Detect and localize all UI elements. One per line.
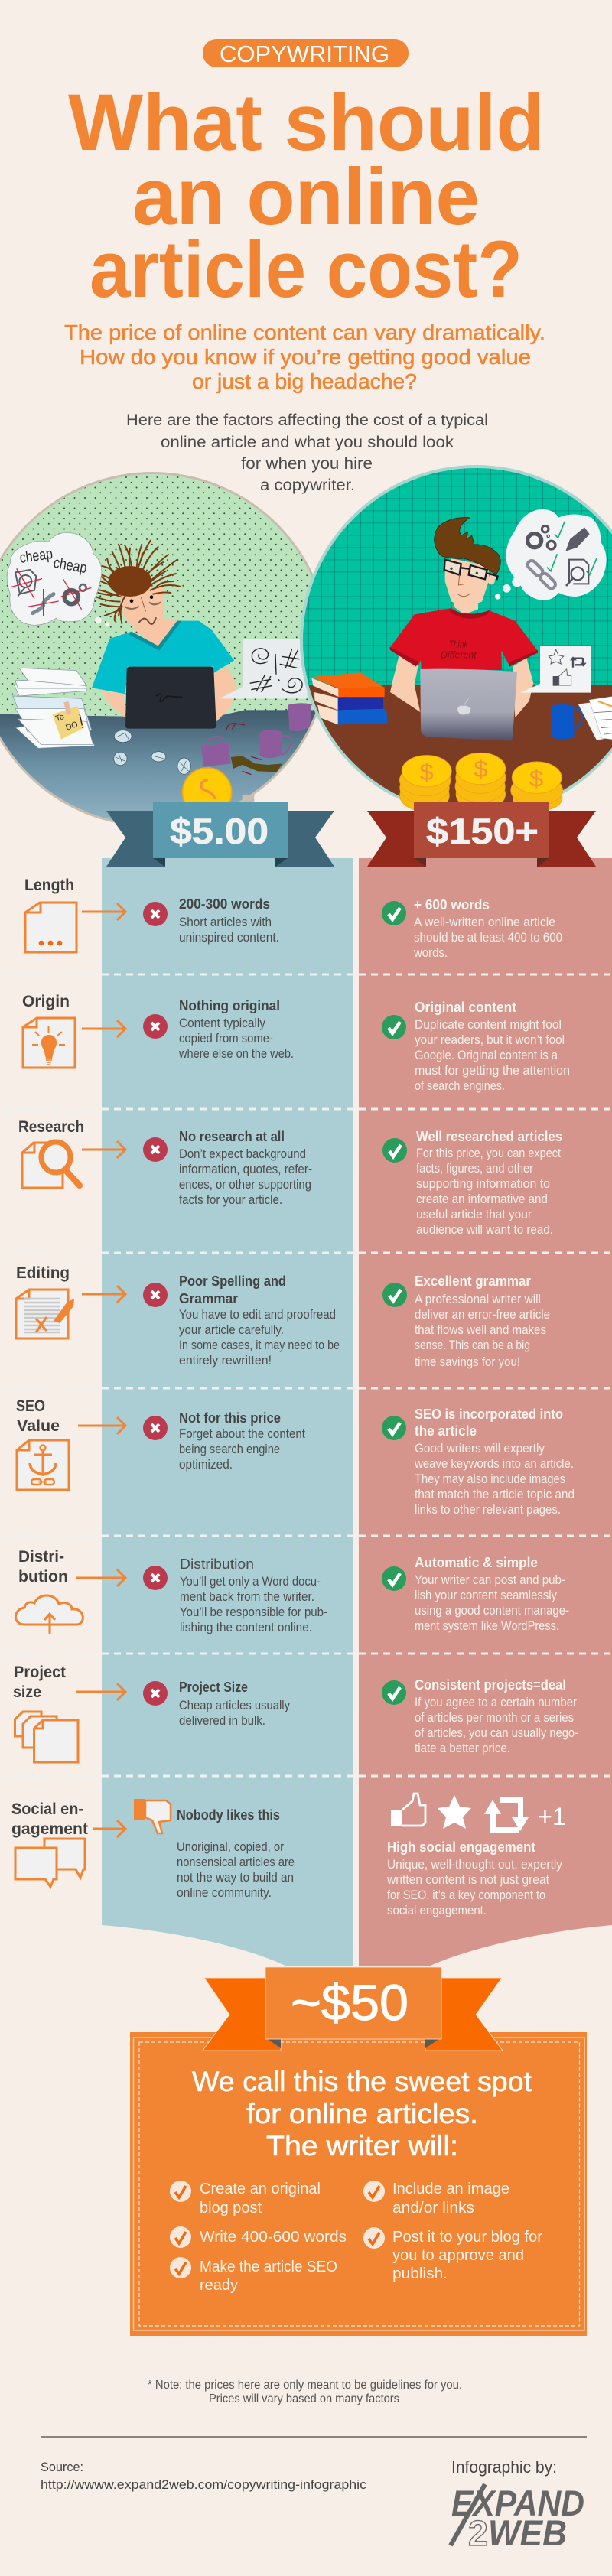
high price text: If you agree to a certain number <box>415 1696 577 1709</box>
low price text: Project Size <box>179 1679 248 1695</box>
low price text: Short articles with <box>179 916 272 929</box>
icon: check <box>382 1138 407 1163</box>
intro text: a copywriter. <box>260 476 355 494</box>
label <box>13 1664 66 1701</box>
low price text: uninspired content. <box>179 931 279 945</box>
high price text: lish your content seamlessly <box>415 1589 558 1602</box>
glasses <box>444 560 498 580</box>
low price text: delivered in bulk. <box>179 1714 265 1728</box>
social note <box>520 646 591 693</box>
t-shirt slogan <box>441 640 477 658</box>
high price text: + 600 words <box>414 896 490 912</box>
high price text: of search engines. <box>415 1079 505 1093</box>
label <box>16 1397 60 1435</box>
icon: x <box>143 1566 168 1590</box>
high price text: words. <box>413 946 448 960</box>
low price text: Forget about the content <box>179 1427 305 1441</box>
low price text: You have to edit and proofread <box>179 1308 336 1322</box>
low price text: You’ll get only a Word docu- <box>180 1575 321 1589</box>
low price text: information, quotes, refer- <box>179 1163 312 1176</box>
desk <box>309 685 612 802</box>
label: size <box>13 1683 41 1701</box>
high price text: that match the article topic and <box>415 1488 575 1501</box>
high price text: time savings for you! <box>415 1355 520 1369</box>
high price text <box>415 1273 550 1369</box>
coin left <box>183 768 254 817</box>
ribbon: ~$50 <box>203 1967 503 2051</box>
icon: check <box>382 1015 406 1039</box>
high price text: Well researched articles <box>416 1128 562 1144</box>
subtitle: or just a big headache? <box>192 369 417 393</box>
high price text: written content is not just great <box>386 1873 549 1887</box>
low price text: Don’t expect background <box>179 1147 306 1161</box>
high price text: create an informative and <box>416 1192 548 1206</box>
low price text: Content typically <box>179 1016 266 1030</box>
subtitle: How do you know if you’re getting good value <box>80 345 531 369</box>
high price text: your readers, but it won’t fool <box>415 1033 565 1047</box>
illustration: premium writer in right circle <box>298 459 612 826</box>
low price text: not the way to build an <box>177 1871 294 1885</box>
low price text <box>178 997 294 1061</box>
row: Length <box>24 877 562 960</box>
icon: document with magnifier <box>22 1142 80 1188</box>
low price text: In some cases, it may need to be <box>179 1338 340 1352</box>
ribbon: $150+: $150+ <box>426 811 539 851</box>
low price text <box>179 1273 340 1368</box>
row: SEO Value <box>16 1397 575 1517</box>
illustration: premium writer in right circle: $ <box>419 759 434 785</box>
checklist left: blog post <box>200 2199 262 2217</box>
low price text: where else on the web. <box>178 1047 294 1061</box>
source <box>41 2460 367 2492</box>
arrow <box>76 1683 125 1700</box>
low price text: Cheap articles usually <box>179 1699 291 1712</box>
high price text <box>413 896 562 960</box>
high price text <box>414 1406 575 1517</box>
arms <box>390 655 533 717</box>
high price text: should be at least 400 to 600 <box>414 931 562 945</box>
heading <box>192 2066 532 2161</box>
high price text: that flows well and makes <box>415 1323 546 1337</box>
ribbon: $5.00 <box>106 802 334 867</box>
high price text: High social engagement <box>387 1839 536 1855</box>
high price text: Excellent grammar <box>415 1273 531 1289</box>
low price text: 200-300 words <box>179 896 270 912</box>
credit: Infographic by: Infographic by: <box>451 2457 557 2477</box>
notes and pencil <box>578 702 606 740</box>
checklist right: Post it to your blog for <box>392 2228 542 2246</box>
desk <box>0 710 315 820</box>
high price text: Your writer can post and pub- <box>415 1573 565 1587</box>
arrow <box>93 1820 125 1837</box>
t-shirt slogan: Different <box>441 650 477 661</box>
illustration: cheap writer in left circle: cheap <box>52 555 88 577</box>
high price text: ment system like WordPress. <box>415 1619 559 1633</box>
high price text <box>386 1839 563 1917</box>
low price text: online community. <box>177 1886 272 1900</box>
label: Research <box>18 1118 84 1136</box>
intro text: online article and what you should look <box>161 434 454 451</box>
low price text <box>177 1807 295 1900</box>
high price text: using a good content manage- <box>415 1604 569 1618</box>
low price text: copied from some- <box>179 1032 273 1046</box>
arrow <box>78 1417 125 1434</box>
laptop <box>420 669 517 741</box>
title: article cost? <box>90 225 522 314</box>
subtitle <box>64 320 545 393</box>
title <box>68 78 545 314</box>
title: an online <box>132 152 480 242</box>
row: Project size <box>13 1664 578 1762</box>
heading: The writer will: <box>266 2130 458 2161</box>
source: Source: <box>41 2460 83 2474</box>
high price text: Google. Original content is a <box>415 1049 558 1062</box>
label: Social en- <box>11 1800 83 1818</box>
icon: speech bubbles <box>15 1839 85 1887</box>
low price text: being search engine <box>179 1442 280 1456</box>
arrow <box>82 1141 125 1158</box>
high price text: deliver an error-free article <box>415 1308 550 1322</box>
low price text: Poor Spelling and <box>179 1273 286 1289</box>
high price text: useful article that your <box>416 1208 532 1221</box>
panel: high price column <box>359 858 612 1966</box>
arrow <box>82 1020 125 1037</box>
icon: document with light bulb <box>23 1018 75 1068</box>
t-shirt slogan: Think <box>449 639 468 650</box>
icon: check <box>382 1416 406 1440</box>
high price text <box>415 1554 569 1633</box>
icon: check <box>382 901 406 925</box>
low price text <box>179 1128 312 1207</box>
label <box>18 1548 68 1586</box>
low price text: nonsensical articles are <box>177 1856 295 1869</box>
paper pile <box>13 668 95 748</box>
row: Research <box>18 1118 562 1237</box>
low price text: No research at all <box>179 1128 285 1144</box>
high price text: Good writers will expertly <box>415 1442 545 1456</box>
ribbon: $150+ <box>367 802 596 867</box>
high price text: audience will want to read. <box>416 1223 553 1237</box>
high price text: Original content <box>415 999 516 1015</box>
checklist left: Create an original <box>200 2180 321 2197</box>
high price text: of articles per month or a series <box>415 1711 574 1725</box>
high price text: A professional writer will <box>415 1293 541 1306</box>
label: Length <box>24 877 74 894</box>
icon: x <box>143 1014 168 1039</box>
checklist left: ready <box>200 2276 239 2294</box>
icon: x <box>143 1137 168 1162</box>
icon: document with anchor <box>17 1440 69 1490</box>
thought bubble left <box>7 532 102 625</box>
low price text: entirely rewritten! <box>179 1354 272 1368</box>
icon: document with pen <box>16 1290 74 1338</box>
heading: We call this the sweet spot <box>192 2066 532 2097</box>
hair <box>94 541 180 623</box>
blue mug <box>551 704 575 740</box>
illustration: premium writer in right circle: $ <box>474 756 488 782</box>
high price text: They may also include images <box>415 1472 565 1486</box>
low price text: ences, or other supporting <box>179 1178 311 1192</box>
illustration: cheap writer in left circle: DO <box>64 720 79 733</box>
high price text <box>416 1128 562 1237</box>
high price text: supporting information to <box>416 1177 550 1191</box>
high price text: for SEO, it’s a key component to <box>387 1888 545 1902</box>
row: Origin <box>22 993 570 1093</box>
intro text: for when you hire <box>241 455 373 473</box>
high price text: A well-written online article <box>414 916 555 929</box>
label: bution <box>18 1568 68 1586</box>
high price text <box>415 1677 578 1755</box>
subtitle: The price of online content can vary dramatically. <box>64 320 545 344</box>
label: Project <box>14 1664 66 1681</box>
logo: Expand2Web: EXPAND <box>451 2483 584 2523</box>
arrow <box>82 1286 125 1303</box>
icon: x <box>143 1416 168 1440</box>
high price text: SEO is incorporated into <box>415 1406 563 1422</box>
coffee stain <box>231 756 282 772</box>
high price text: sense. This can be a big <box>415 1338 530 1352</box>
ribbon: $5.00: $5.00 <box>170 811 269 851</box>
checklist left: Write 400-600 words <box>200 2228 347 2246</box>
icon: x <box>143 1283 168 1307</box>
panel: sweet spot <box>130 2032 587 2336</box>
checklist left <box>170 2180 347 2294</box>
intro text <box>126 411 488 494</box>
illustration: cheap writer in left circle <box>0 472 317 823</box>
scribble note <box>220 639 308 698</box>
high price text: links to other relevant pages. <box>415 1503 561 1517</box>
low price text: Not for this price <box>179 1410 281 1426</box>
high price text: Automatic & simple <box>415 1554 538 1570</box>
checklist right: and/or links <box>392 2199 474 2217</box>
high price text: For this price, you can expect <box>416 1147 561 1160</box>
checklist right: you to approve and <box>392 2246 524 2264</box>
coin stacks <box>399 762 563 812</box>
arrow <box>82 903 125 920</box>
high price text: Unique, well-thought out, expertly <box>387 1858 563 1872</box>
low price text: your article carefully. <box>179 1323 284 1337</box>
icon: thumbs down <box>134 1799 171 1833</box>
logo: Expand2Web: WEB <box>488 2513 567 2553</box>
thought bubble right <box>506 509 607 600</box>
intro text: Here are the factors affecting the cost of a typical <box>126 411 488 429</box>
illustration: premium writer in right circle: $ <box>529 766 543 792</box>
book stack <box>311 672 384 688</box>
high price text: the article <box>415 1423 477 1439</box>
low price text <box>179 1679 291 1728</box>
row: Editing <box>16 1264 550 1369</box>
low price text: ment back from the writer. <box>180 1590 314 1604</box>
icon: check <box>382 1566 406 1591</box>
illustration: cheap writer in left circle: cheap <box>18 545 54 567</box>
high price text: weave keywords into an article. <box>414 1457 574 1471</box>
label: SEO <box>16 1397 45 1415</box>
low price text: You’ll be responsible for pub- <box>180 1605 327 1619</box>
category pill: COPYWRITING: COPYWRITING <box>220 41 389 67</box>
low price text: facts for your article. <box>179 1193 282 1207</box>
row: Social engagement <box>11 1794 566 1917</box>
label: gagement <box>11 1820 88 1838</box>
checklist right <box>363 2180 542 2282</box>
footnote: Prices will vary based on many factors <box>209 2392 399 2405</box>
high price text <box>415 999 570 1093</box>
checklist right: publish. <box>392 2265 448 2282</box>
high price text: facts, figures, and other <box>416 1162 533 1176</box>
icon: stacked documents <box>15 1712 78 1762</box>
high price text: social engagement. <box>387 1904 487 1917</box>
low price text: optimized. <box>179 1458 233 1472</box>
high price text: of articles, you can usually nego- <box>415 1726 578 1740</box>
low price text: Distribution <box>180 1556 254 1572</box>
title: What should <box>68 78 545 168</box>
icon: x <box>143 902 168 926</box>
label: Value <box>17 1417 60 1435</box>
icon: check <box>382 1283 407 1307</box>
high price text: Consistent projects=deal <box>415 1677 566 1693</box>
checklist right: Include an image <box>392 2180 509 2197</box>
illustration: cheap writer in left circle: To <box>54 712 66 724</box>
low price text <box>179 1410 305 1472</box>
ribbon: ~$50: ~$50 <box>291 1974 409 2031</box>
footnote <box>148 2379 462 2405</box>
label: Editing <box>16 1264 70 1282</box>
heading: for online articles. <box>246 2098 478 2129</box>
low price text: Unoriginal, copied, or <box>177 1840 284 1854</box>
high price text: must for getting the attention <box>415 1064 570 1078</box>
mugs <box>288 703 311 731</box>
icons: social actions <box>391 1794 566 1833</box>
low price text <box>180 1556 327 1634</box>
checklist left: Make the article SEO <box>200 2258 337 2275</box>
panel: low price column <box>102 858 353 1966</box>
label <box>11 1800 88 1838</box>
icon: cloud upload <box>15 1595 83 1634</box>
high price text: Duplicate content might fool <box>415 1018 562 1032</box>
crumpled paper <box>114 730 190 774</box>
icon: x <box>143 1681 168 1706</box>
label: Origin <box>22 993 70 1010</box>
post-it <box>52 706 84 740</box>
low price text <box>179 896 279 945</box>
t-shirt <box>390 608 538 670</box>
low price text: lishing the content online. <box>180 1621 312 1634</box>
low price text: Grammar <box>179 1290 238 1306</box>
low price text: Nothing original <box>179 997 280 1013</box>
laptop <box>125 667 216 729</box>
low price text: Nobody likes this <box>177 1807 280 1823</box>
arrow <box>76 1569 125 1586</box>
logo: Expand2Web <box>451 2483 584 2553</box>
label: Distri- <box>18 1548 64 1566</box>
icon: check <box>382 1680 406 1705</box>
logo: Expand2Web: 2 <box>468 2513 488 2553</box>
writer <box>92 585 237 721</box>
icon: document <box>25 903 76 952</box>
source: http://wwww.expand2web.com/copywriting-infographic <box>41 2477 367 2492</box>
icons: social actions: +1 <box>538 1803 566 1830</box>
footnote: * Note: the prices here are only meant to be guidelines for you. <box>148 2379 462 2392</box>
row: Distribution <box>15 1548 569 1634</box>
neck and head <box>454 603 478 613</box>
high price text: tiate a better price. <box>415 1742 510 1755</box>
hair <box>435 517 500 575</box>
